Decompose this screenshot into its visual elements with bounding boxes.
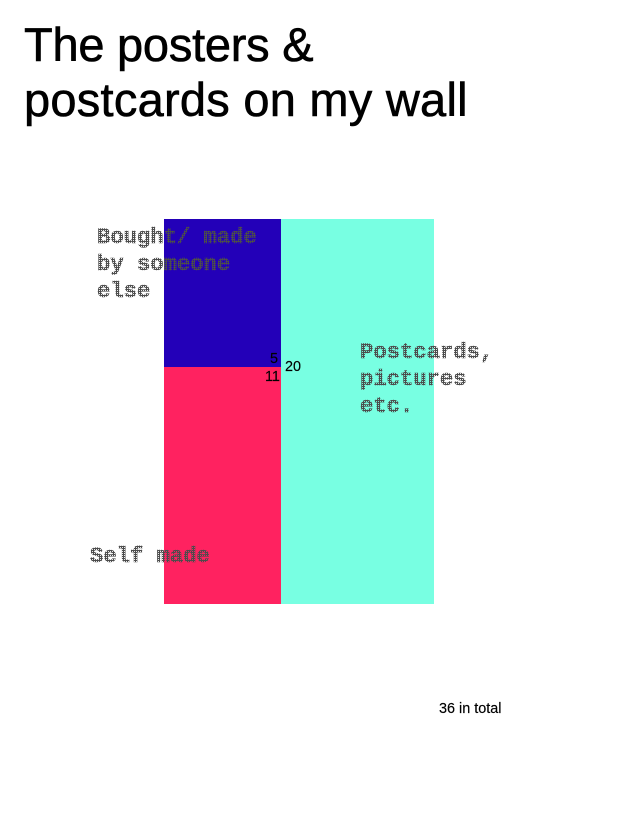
block: postcards, pictures etc. xyxy=(281,219,434,604)
value: 11: 11 xyxy=(265,369,280,385)
title: The posters & xyxy=(24,18,313,71)
title: postcards on my wall xyxy=(24,73,468,126)
block: bought or made by someone else xyxy=(164,219,281,367)
total note: 36 in total xyxy=(439,701,501,717)
value: 5: 5 xyxy=(270,351,278,367)
label: postcards, pictures etc.: Postcards, xyxy=(360,340,493,365)
label: bought or made by someone else: by someone xyxy=(97,252,230,277)
chart: treemap of posters and postcards xyxy=(90,219,493,604)
block: self made xyxy=(164,367,281,604)
label: bought or made by someone else: Bought/ made xyxy=(97,225,257,250)
label: postcards, pictures etc.: pictures xyxy=(360,367,467,392)
label: bought or made by someone else xyxy=(97,224,257,305)
label: postcards, pictures etc.: etc. xyxy=(360,394,413,419)
label: bought or made by someone else: else xyxy=(97,279,150,304)
label: self made: Self made xyxy=(90,544,210,569)
label: postcards, pictures etc. xyxy=(360,339,493,420)
title xyxy=(24,18,468,126)
value: 20: 20 xyxy=(285,359,301,375)
